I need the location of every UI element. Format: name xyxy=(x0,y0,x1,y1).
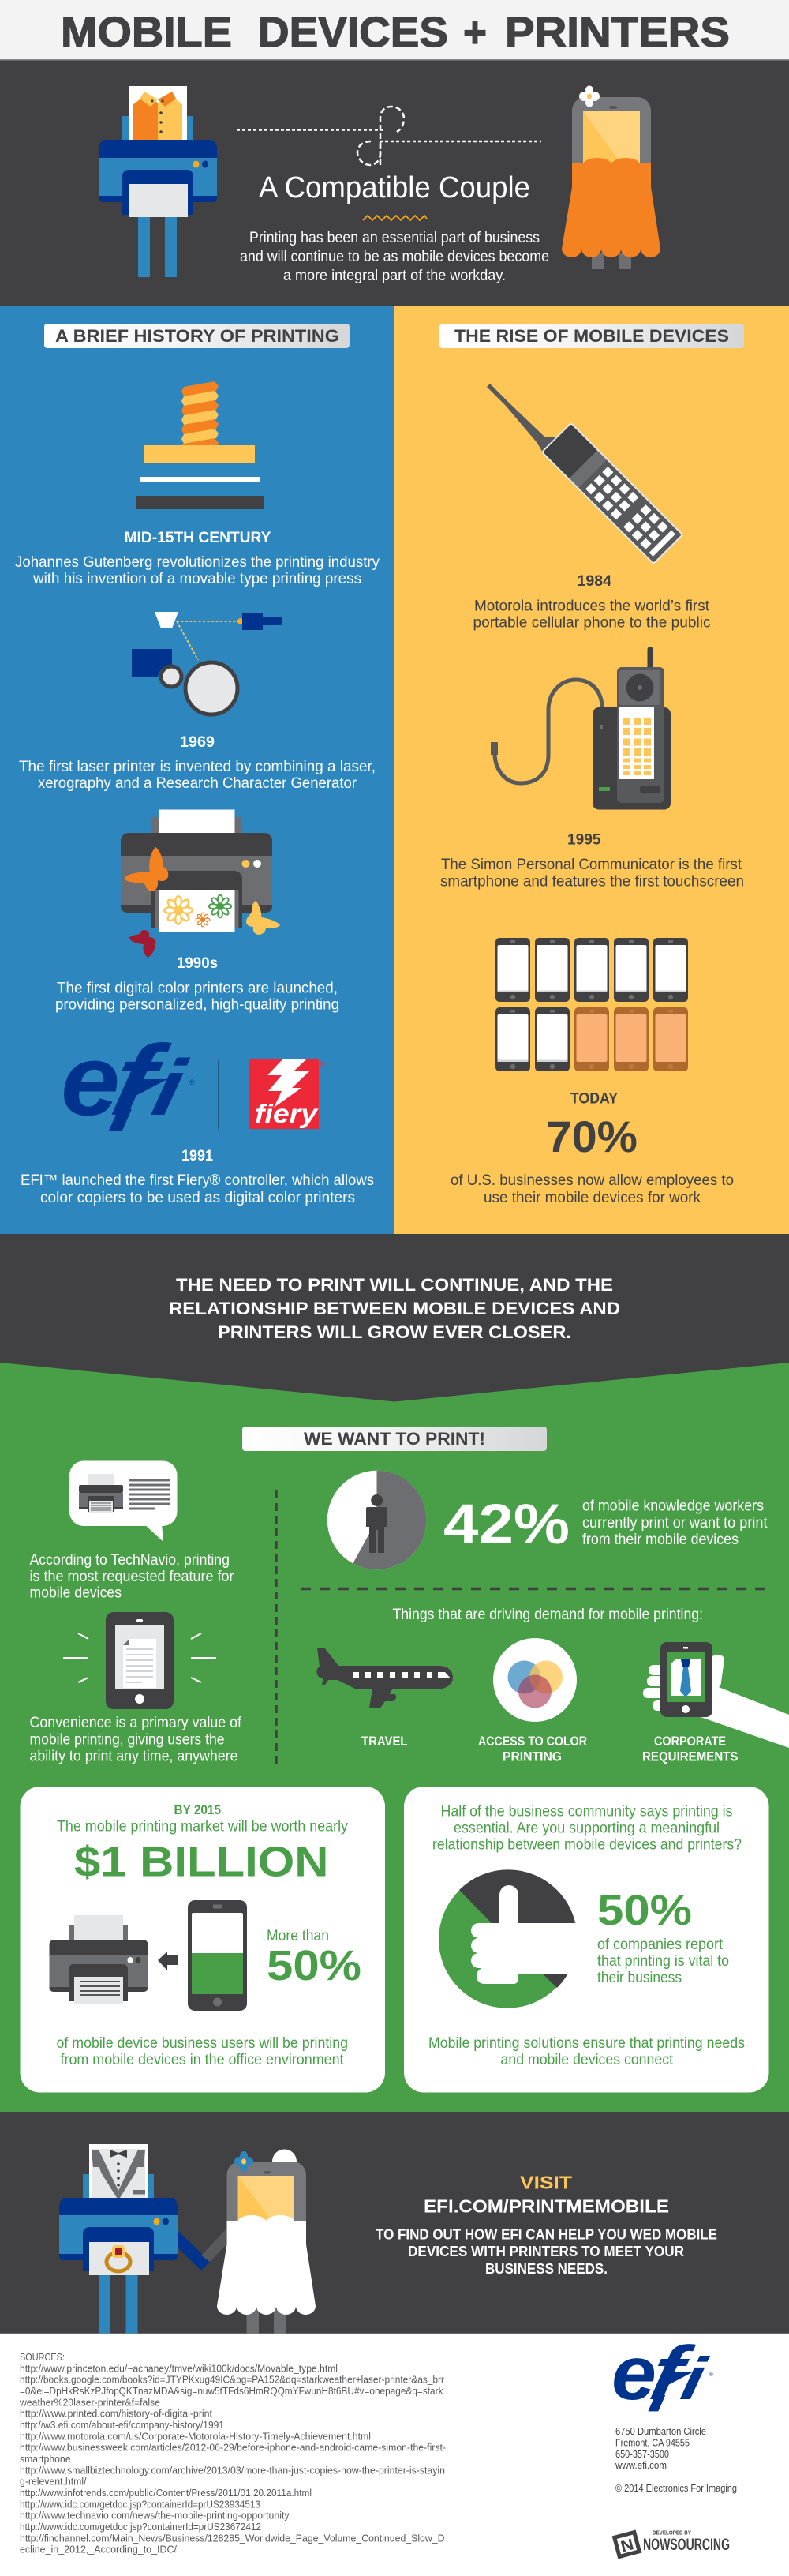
logo: nowsourcing xyxy=(612,2529,730,2559)
text: 1984: portable cellular phone to the public xyxy=(473,614,710,632)
panel: call to action xyxy=(0,2112,789,2334)
heading pill: mobile xyxy=(439,324,744,348)
footer sources list: http://www.businessweek.com/articles/2012-06-29/before-iphone-and-android-came-simon-the-first- xyxy=(20,2443,446,2454)
text: convenience: mobile printing, giving users the xyxy=(30,1732,224,1748)
heading pill: history: A BRIEF HISTORY OF PRINTING xyxy=(55,326,339,346)
icon: bride phone xyxy=(201,2149,316,2334)
footer sources list: http://www.printed.com/history-of-digital-print xyxy=(20,2409,213,2420)
text: technavio xyxy=(30,1552,234,1601)
stat: 50 percent of companies xyxy=(597,1887,729,1986)
text: 1969: xerography and a Research Character Generator xyxy=(38,775,357,792)
text: by 2015 xyxy=(57,1802,348,1835)
icon: phone showing document xyxy=(63,1612,216,1709)
text: convenience xyxy=(30,1715,242,1765)
footer sources list: http://www.princeton.edu/~achaney/tmve/wiki100k/docs/Movable_type.html xyxy=(20,2363,338,2374)
panel: a brief history of printing xyxy=(0,306,394,1234)
footer address: 6750 Dumbarton Circle xyxy=(615,2426,706,2437)
text: visit call to action: TO FIND OUT HOW EFI CAN HELP YOU WED MOBILE xyxy=(376,2226,717,2242)
footer sources list: http://www.technavio.com/news/the-mobile-printing-opportunity xyxy=(20,2510,290,2522)
footer sources list: http://www.infotrends.com/public/Content/Press/2011/01.20.2011a.html xyxy=(20,2488,312,2499)
text: business community xyxy=(432,1803,742,1854)
text: 1990s xyxy=(55,955,339,1014)
text: 1984: 1984 xyxy=(578,573,611,590)
text: visit call to action: BUSINESS NEEDS. xyxy=(485,2261,608,2277)
text: mid-15th century: MID-15TH CENTURY xyxy=(125,530,271,546)
text: by 2015: BY 2015 xyxy=(174,1802,221,1817)
logo: nowsourcing: N xyxy=(619,2536,636,2556)
footer sources list: http://finchannel.com/Main_News/Business/128285_Worldwide_Page_Volume_Continued_Slow_D xyxy=(20,2533,445,2544)
footer sources list: weather%20laser-printer&f=false xyxy=(19,2397,160,2408)
footer sources list: smartphone xyxy=(20,2454,71,2465)
text: convenience: ability to print any time, anywhere xyxy=(30,1748,238,1765)
chart: phones pictogram 70 percent xyxy=(495,938,688,1071)
title xyxy=(61,9,730,56)
text: technavio: mobile devices xyxy=(30,1585,122,1601)
text: 1995: 1995 xyxy=(567,832,601,848)
footer sources list: ecline_in_2012,_According_to_IDC/ xyxy=(20,2544,178,2555)
labels: demand drivers xyxy=(361,1734,739,1764)
footer address: www.efi.com xyxy=(615,2460,667,2471)
icon: hand holding phone with tie xyxy=(643,1642,789,1748)
stat: more than 50 percent: More than xyxy=(267,1928,329,1944)
footer sources list: http://www.idc.com/getdoc.jsp?containerId=prUS23934513 xyxy=(20,2499,260,2510)
footer sources list xyxy=(19,2352,446,2555)
divider between logos xyxy=(218,1059,219,1129)
footer sources list: http://www.motorola.com/us/Corporate-Motorola-History-Timely-Achievement.html xyxy=(20,2431,371,2442)
banner: closing statement: THE NEED TO PRINT WILL CONTINUE, AND THE xyxy=(176,1275,613,1295)
stat: one billion: $1 BILLION xyxy=(74,1838,328,1885)
footer sources list: http://www.idc.com/getdoc.jsp?containerId=prUS23672412 xyxy=(20,2522,261,2533)
text: 1991 xyxy=(21,1148,374,1206)
title: PRINTERS xyxy=(505,9,730,56)
text: knowledge workers: currently print or want to print xyxy=(582,1515,768,1532)
logo: fiery xyxy=(249,1059,326,1129)
labels: demand drivers: ACCESS TO COLOR xyxy=(478,1734,587,1749)
footer address: © 2014 Electronics For Imaging xyxy=(615,2483,737,2494)
text: knowledge workers: from their mobile devices xyxy=(582,1532,739,1548)
footer logo: efi: e xyxy=(611,2331,656,2416)
labels: demand drivers: TRAVEL xyxy=(361,1734,407,1749)
text: 1990s: 1990s xyxy=(177,955,218,972)
chart: 42 percent pie with person xyxy=(327,1471,426,1569)
text: technavio: is the most requested feature for xyxy=(30,1569,234,1585)
stat: 42 percent: 42% xyxy=(443,1494,570,1556)
text: 1984: Motorola introduces the world’s first xyxy=(474,598,710,614)
text: office environment xyxy=(57,2035,348,2068)
footer address: Fremont, CA 94555 xyxy=(615,2438,690,2449)
page top background xyxy=(0,0,789,59)
text: office environment: of mobile device business users will be printing xyxy=(57,2035,348,2052)
footer logo: efi: i xyxy=(676,2345,712,2413)
arrow: phone to printer xyxy=(158,1952,178,1970)
labels: demand drivers: CORPORATE xyxy=(654,1734,726,1749)
banner: closing statement: PRINTERS WILL GROW EVER CLOSER. xyxy=(218,1322,571,1342)
text: visit call to action: VISIT xyxy=(520,2173,572,2193)
stat: 50 percent of companies: of companies report xyxy=(597,1937,724,1953)
icon: phone half filled xyxy=(188,1900,247,2011)
text: by 2015: The mobile printing market will be worth nearly xyxy=(57,1819,348,1835)
footer logo: efi xyxy=(611,2330,713,2416)
title: + xyxy=(463,9,487,56)
icon: speech bubble with printer xyxy=(69,1460,177,1542)
footer sources list: g-relevent.html/ xyxy=(20,2477,87,2488)
text: business community: relationship between mobile devices and printers? xyxy=(432,1836,742,1854)
footer address xyxy=(615,2426,737,2494)
footer sources list: http://w3.efi.com/about-efi/company-history/1991 xyxy=(20,2420,224,2431)
icon: printer xyxy=(49,1915,148,2004)
icon: dotted ribbon knot xyxy=(237,107,541,165)
banner: closing statement: RELATIONSHIP BETWEEN MOBILE DEVICES AND xyxy=(169,1299,620,1318)
icon: phone bride in orange dress xyxy=(562,85,660,269)
heading: a compatible couple: A Compatible Couple xyxy=(259,171,530,204)
logo: efi: ® xyxy=(189,1078,195,1086)
text: 1995 xyxy=(440,832,744,891)
text: 1995: The Simon Personal Communicator is the first xyxy=(441,857,742,873)
text: today 70 percent: TODAY xyxy=(570,1091,618,1107)
icon: laser printer diagram xyxy=(132,612,282,714)
icon: printing press xyxy=(136,381,264,509)
text: office environment: from mobile devices in the office environment xyxy=(60,2052,344,2068)
text: 1991: 1991 xyxy=(181,1148,213,1164)
stat: 50 percent of companies: that printing is vital to xyxy=(597,1953,729,1970)
text: convenience: Convenience is a primary value of xyxy=(30,1715,242,1731)
text: today 70 percent: of U.S. businesses now allow employees to xyxy=(451,1172,734,1189)
heading pill: we want to print xyxy=(242,1427,547,1451)
stat: more than 50 percent: 50% xyxy=(267,1942,361,1989)
intro paragraph: Printing has been an essential part of business xyxy=(249,230,540,246)
icon: groom printer xyxy=(59,2144,210,2334)
icon: airplane xyxy=(316,1648,453,1708)
text: today 70 percent: 70% xyxy=(546,1112,638,1161)
logo: nowsourcing: DEVELOPED BY xyxy=(653,2531,691,2536)
intro paragraph: a more integral part of the workday. xyxy=(283,268,506,284)
labels: demand drivers: REQUIREMENTS xyxy=(642,1749,739,1764)
text: visit call to action: DEVICES WITH PRINTERS TO MEET YOUR xyxy=(408,2244,684,2259)
text: mid-15th century xyxy=(15,530,380,587)
text: 1984 xyxy=(473,573,710,632)
banner: closing statement xyxy=(0,1234,789,1402)
footer sources list: SOURCES: xyxy=(20,2352,65,2363)
text: mobile printing solutions: and mobile devices connect xyxy=(500,2052,674,2068)
stat: more than 50 percent xyxy=(267,1928,361,1989)
zigzag ornament xyxy=(363,216,427,220)
chart: thumbs up 50 percent pie xyxy=(439,1869,581,2008)
title: MOBILE xyxy=(61,9,232,56)
text: 1991: color copiers to be used as digital color printers xyxy=(40,1190,355,1206)
text: 1990s: The first digital color printers are launched, xyxy=(57,981,338,996)
text: business community: Half of the business community says printing is xyxy=(440,1803,732,1820)
logo: efi: f xyxy=(103,1025,176,1137)
text: 1969: 1969 xyxy=(180,734,215,751)
logo: fiery: fiery xyxy=(255,1099,319,1128)
labels: demand drivers: PRINTING xyxy=(503,1749,562,1764)
text: 1969 xyxy=(19,734,376,792)
text: visit call to action xyxy=(376,2173,717,2277)
panel: intro xyxy=(0,59,789,306)
panel: the rise of mobile devices xyxy=(394,306,789,1234)
text: 1991: EFI™ launched the first Fiery® controller, which allows xyxy=(21,1172,374,1189)
logo: nowsourcing: NOWSOURCING xyxy=(643,2536,730,2554)
text: today 70 percent: use their mobile devices for work xyxy=(484,1190,701,1206)
text: knowledge workers xyxy=(582,1498,768,1548)
footer sources list: http://www.smallbiztechnology.com/archive/2013/03/more-than-just-copies-how-the-printer-is-stayin xyxy=(20,2465,445,2476)
text: today 70 percent xyxy=(451,1091,734,1206)
card: half of business community xyxy=(404,1787,768,2092)
logo: efi xyxy=(61,1024,195,1137)
card: one billion market xyxy=(21,1787,385,2092)
text: business community: essential. Are you supporting a meaningful xyxy=(454,1820,720,1836)
text: knowledge workers: of mobile knowledge workers xyxy=(582,1498,764,1514)
text: mid-15th century: with his invention of a movable type printing press xyxy=(32,571,361,587)
text: 1990s: providing personalized, high-quality printing xyxy=(55,996,339,1014)
text: mobile printing solutions: Mobile printing solutions ensure that printing needs xyxy=(428,2035,745,2052)
icon: printer groom with shirt xyxy=(99,86,217,277)
icon: simon phone with cord xyxy=(491,647,671,810)
intro paragraph: and will continue to be as mobile devices become xyxy=(240,249,549,265)
footer address: 650-357-3500 xyxy=(615,2449,669,2460)
footer logo: efi: ® xyxy=(709,2372,713,2378)
stat: 50 percent of companies: their business xyxy=(597,1970,682,1986)
logo: fiery: ® xyxy=(320,1060,326,1068)
text: 1995: smartphone and features the first touchscreen xyxy=(440,873,744,891)
text: technavio: According to TechNavio, printing xyxy=(30,1552,230,1569)
icon: brick phone xyxy=(487,384,682,564)
title: DEVICES xyxy=(258,9,448,56)
panel: we want to print xyxy=(0,1234,789,2112)
text: mobile printing solutions xyxy=(428,2035,745,2068)
text: mid-15th century: Johannes Gutenberg revolutionizes the printing industry xyxy=(15,554,380,571)
text: 1969: The first laser printer is invented by combining a laser, xyxy=(19,759,376,775)
footer sources list: =0&ei=DpHkRsKzPJfopQKTnazMDA&sig=nuw5tTFds6HmRQQmYFwunH8t6BU#v=onepage&q=stark xyxy=(20,2386,443,2397)
logo: efi: e xyxy=(61,1024,120,1136)
footer logo: efi: f xyxy=(643,2330,699,2416)
icon: colour printer with butterflies xyxy=(121,810,280,958)
stat: 50 percent of companies: 50% xyxy=(597,1887,692,1934)
logo: efi: i xyxy=(145,1044,194,1132)
icon: colour venn circles xyxy=(493,1638,577,1722)
footer sources list: http://books.google.com/books?id=JTYPKxug49IC&pg=PA152&dq=starkweather+laser-printer&as_brr xyxy=(20,2375,444,2386)
heading pill: we want to print: WE WANT TO PRINT! xyxy=(304,1429,485,1449)
text: visit call to action: EFI.COM/PRINTMEMOBILE xyxy=(424,2196,669,2217)
intro paragraph xyxy=(240,230,549,284)
text: things driving demand: Things that are driving demand for mobile printing: xyxy=(393,1607,703,1623)
heading pill: mobile: THE RISE OF MOBILE DEVICES xyxy=(454,326,729,346)
